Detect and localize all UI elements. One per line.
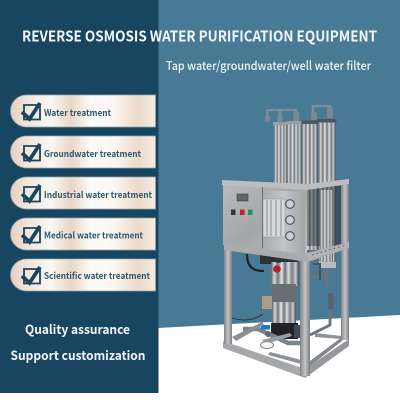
left dark panel bbox=[0, 0, 158, 393]
item: medical water treatment bbox=[10, 218, 156, 250]
lower plumbing and pump bbox=[232, 254, 334, 343]
base frame bbox=[223, 322, 349, 378]
display bbox=[237, 194, 248, 201]
item: groundwater treatment bbox=[10, 136, 156, 168]
item: scientific water treatment: Scientific water treatment bbox=[44, 269, 150, 282]
item: industrial water treatment: Industrial water treatment bbox=[44, 188, 152, 201]
item: groundwater treatment: Groundwater treatment bbox=[44, 147, 141, 160]
item: industrial water treatment bbox=[10, 177, 156, 209]
frame legs bbox=[224, 180, 349, 376]
support customization text: Support customization bbox=[10, 345, 146, 364]
item: water treatment: Water treatment bbox=[44, 106, 111, 119]
membrane tubes and top pipes bbox=[265, 106, 341, 268]
control switches bbox=[231, 210, 252, 215]
quality assurance text: Quality assurance bbox=[25, 319, 130, 338]
item: scientific water treatment bbox=[10, 259, 156, 291]
frame right side brace with holes bbox=[307, 242, 349, 261]
item: water treatment bbox=[10, 95, 156, 127]
machine: reverse osmosis equipment bbox=[222, 106, 349, 378]
list of water treatment uses bbox=[10, 95, 156, 291]
pressure gauges bbox=[286, 200, 294, 240]
flow meters bbox=[263, 199, 285, 237]
subtitle: Tap water/groundwater/well water filter bbox=[166, 57, 371, 74]
item: medical water treatment: Medical water treatment bbox=[44, 228, 143, 242]
control cabinet bbox=[222, 179, 349, 262]
